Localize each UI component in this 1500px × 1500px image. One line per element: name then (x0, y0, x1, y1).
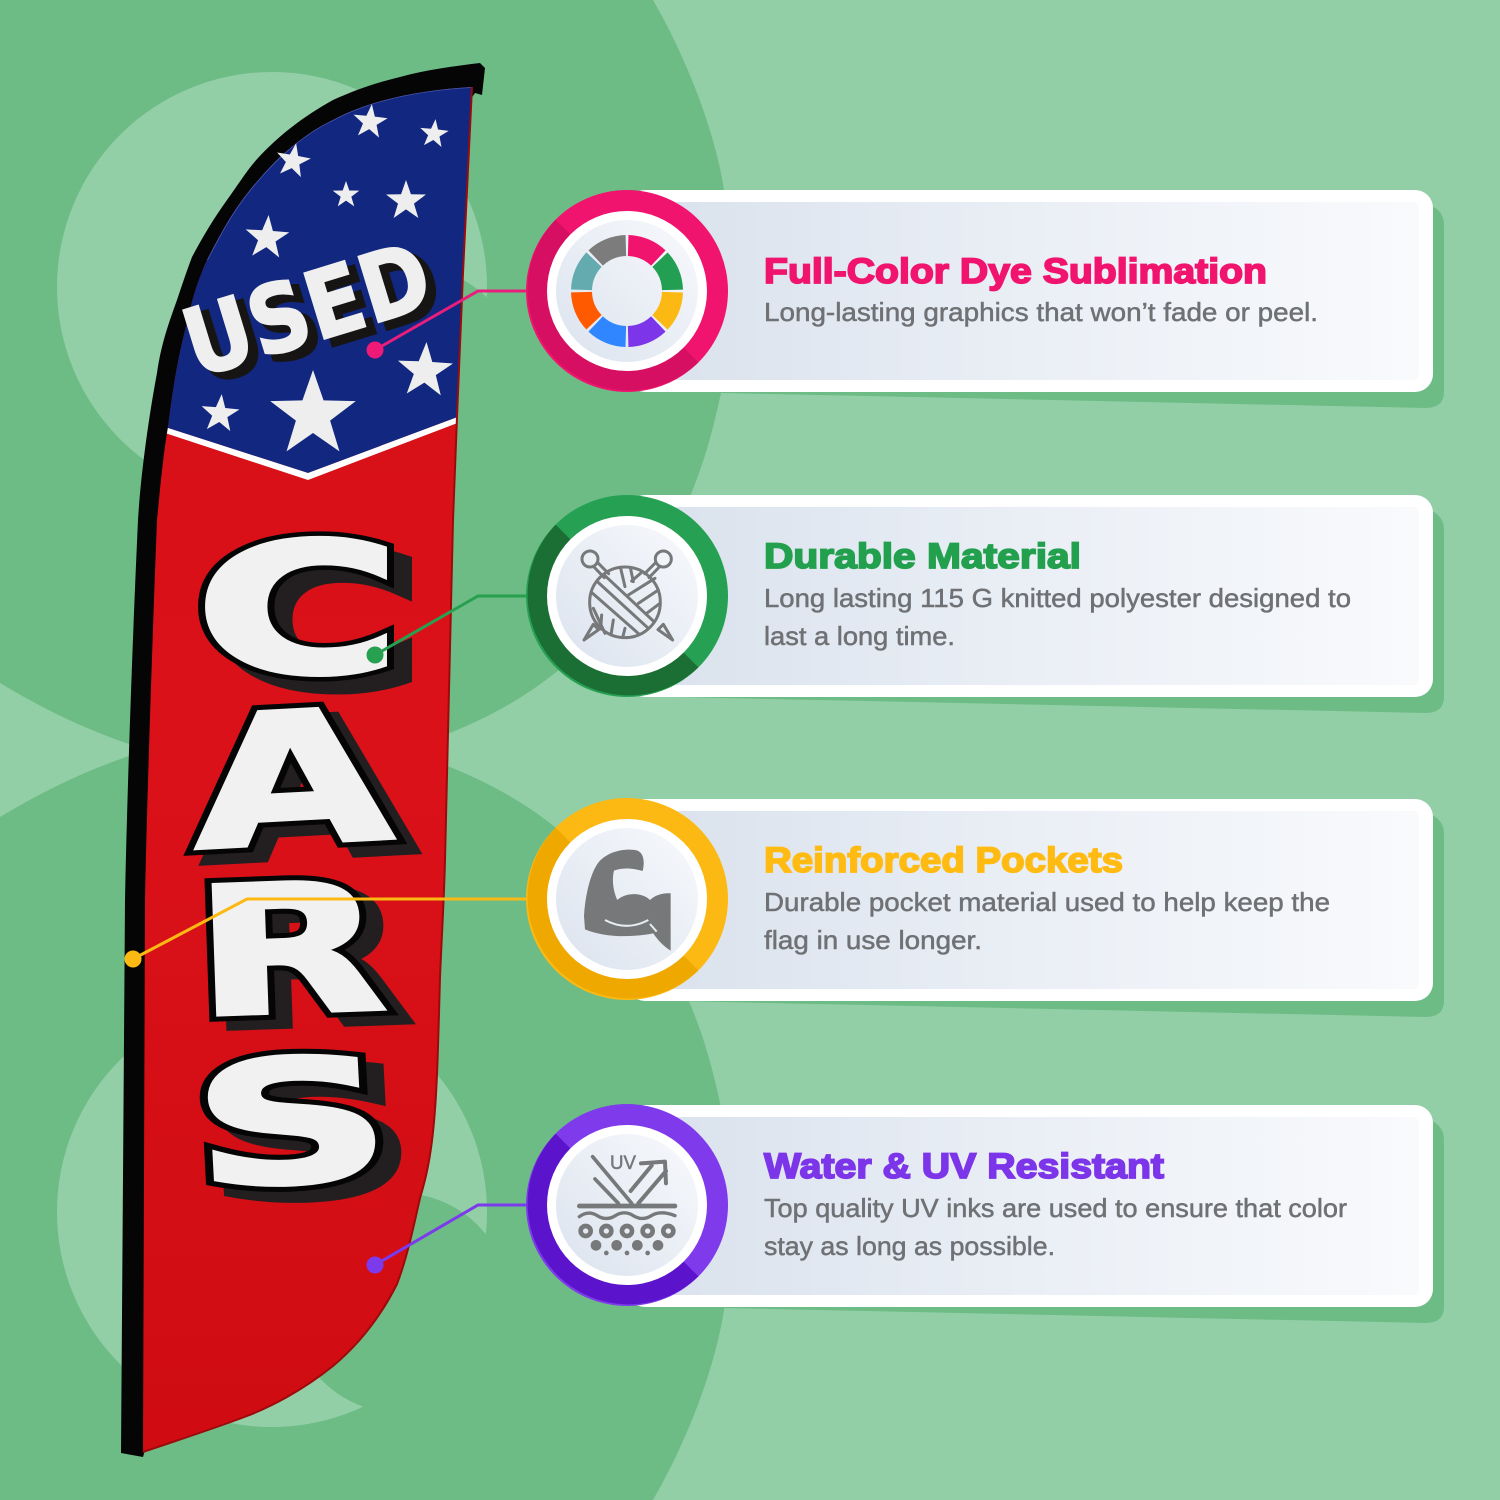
panel: durable material (526, 495, 1444, 713)
text: Long-lasting graphics that won’t fade or peel. (764, 297, 1318, 327)
stars (200, 102, 454, 451)
panel: water and uv resistant (526, 1104, 1444, 1323)
text: flag in use longer. (764, 925, 982, 955)
text: Long lasting 115 G knitted polyester designed to (764, 583, 1351, 613)
connector: durable material (366, 596, 530, 664)
flag word: CARS: A (187, 670, 396, 891)
flag word: CARS: S (188, 1020, 396, 1227)
flag word: CARS: S (206, 1031, 414, 1238)
icon: flexed arm (584, 850, 671, 951)
panel: full-color dye sublimation (526, 190, 1444, 408)
icon: uv protection (579, 1153, 675, 1255)
flag word: CARS: R (190, 844, 389, 1058)
text: stay as long as possible. (764, 1231, 1055, 1261)
text: Top quality UV inks are used to ensure that color (764, 1193, 1347, 1223)
icon: yarn ball and needles (582, 551, 673, 640)
ring badge (526, 1104, 728, 1306)
panel: reinforced pockets (526, 798, 1444, 1017)
flag word: CARS: C (195, 505, 401, 715)
text (764, 1193, 1347, 1261)
flag word: USED: USED (180, 227, 452, 405)
text (764, 887, 1330, 955)
feather flag (121, 63, 485, 1457)
ring badge (526, 798, 728, 1000)
flag word: CARS: A (202, 680, 411, 901)
ring badge (526, 495, 728, 697)
heading: Full-Color Dye Sublimation (764, 252, 1267, 291)
connector: water and uv (366, 1205, 530, 1274)
ring badge (526, 190, 728, 392)
icon: uv protection: UV (610, 1153, 636, 1174)
flag word: CARS: R (207, 853, 406, 1067)
flag word: CARS: S (188, 1020, 396, 1227)
connector: reinforced pockets (124, 899, 530, 968)
heading: Durable Material (764, 537, 1081, 576)
flag word: CARS: A (187, 670, 396, 891)
heading: Reinforced Pockets (764, 841, 1123, 880)
text: last a long time. (764, 621, 955, 651)
text (764, 583, 1351, 651)
text: Durable pocket material used to help keep the (764, 887, 1330, 917)
flag word: USED: USED (171, 221, 443, 399)
flag word: CARS: C (195, 505, 401, 715)
connector: dye sublimation (366, 291, 530, 358)
flag word: CARS: C (213, 518, 419, 728)
flag word: CARS: R (190, 844, 389, 1058)
icon: color wheel (563, 227, 691, 355)
heading: Water & UV Resistant (764, 1147, 1164, 1186)
flag word: CARS (187, 505, 419, 1238)
